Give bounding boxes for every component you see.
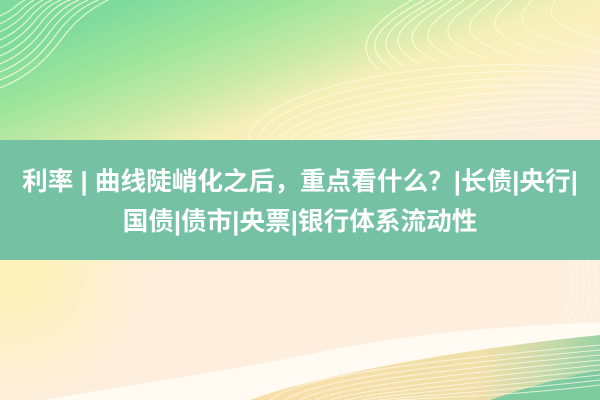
bottom wave lines	[155, 261, 600, 400]
bottom green corner	[490, 370, 600, 400]
wave lines: top left	[0, 0, 108, 88]
bottom white ribbon	[0, 322, 600, 400]
wave lines: top right	[366, 0, 600, 70]
title line 1: 利率 | 曲线陡峭化之后，重点看什么？|长债|央行|	[22, 168, 578, 196]
wave lines: center right arcs	[248, 65, 600, 140]
bottom wave band	[250, 335, 600, 400]
title band	[0, 140, 600, 260]
title line 2: 国债|债市|央票|银行体系流动性	[123, 208, 477, 236]
